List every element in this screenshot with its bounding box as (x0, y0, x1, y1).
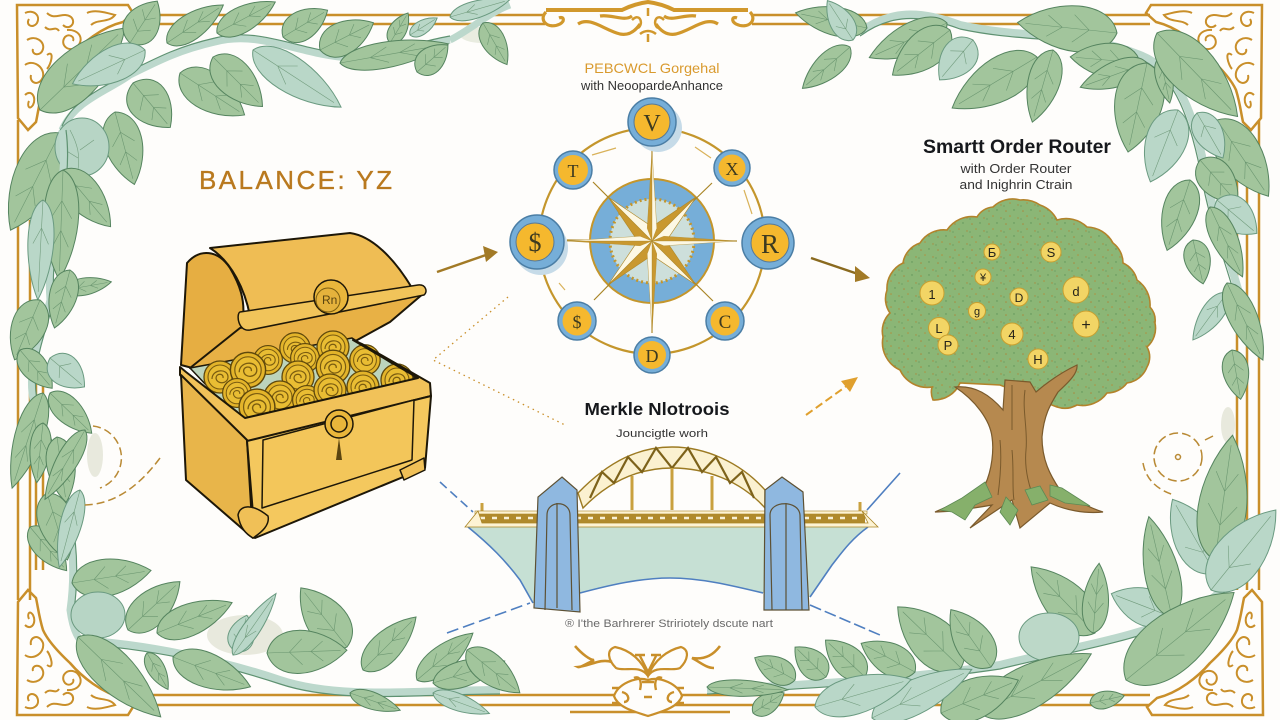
bridge arch (578, 447, 765, 508)
arrow: chest to compass (437, 246, 498, 272)
heading: compass (580, 60, 723, 93)
coin symbols: S (1047, 245, 1056, 260)
bottom centre ornament (570, 646, 730, 716)
compass coin nodes: $ (528, 228, 542, 257)
arrow: bridge to tree (806, 377, 858, 415)
coin symbols: L (935, 321, 943, 336)
bridge hangers (482, 468, 860, 512)
treasure chest icon (180, 233, 431, 538)
bridge caption: ® I'the Barhrerer Stririotely dscute nart (565, 618, 773, 630)
compass coin nodes: X (726, 159, 738, 179)
bridge water body (468, 527, 868, 603)
chest interior with coins (190, 331, 418, 425)
coin symbols: g (974, 306, 980, 318)
decorative dashed circle right (1143, 433, 1213, 495)
foliage: bottom-left vine (64, 552, 529, 720)
treasure chest icon: Rn (322, 293, 337, 307)
compass coin nodes: R (761, 229, 779, 259)
coin symbols: ¥ (979, 272, 987, 284)
coin symbols: 1 (928, 287, 936, 302)
coin symbols: d (1072, 284, 1080, 299)
dotted connector (433, 297, 565, 425)
heading: bridge: Merkle Nlotroois (584, 399, 730, 419)
tree crown (882, 199, 1156, 408)
compass coin nodes: D (646, 346, 658, 366)
compass rose (567, 150, 737, 333)
compass centre disc (590, 179, 714, 303)
tree coins (920, 242, 1099, 369)
foliage: bottom-right vine (707, 432, 1280, 720)
coin symbols: D (1015, 291, 1024, 305)
heading: compass: PEBCWCL Gorgehal (584, 60, 720, 76)
decorative dashed circle left (83, 426, 160, 505)
heading: router (923, 137, 1112, 192)
foliage: left side vine (0, 130, 124, 640)
arrow: compass to tree (811, 258, 870, 282)
foliage: top-right vine (793, 0, 1280, 443)
heading: compass: with NeoopardeAnhance (580, 78, 723, 93)
dashed bridge cables (440, 473, 900, 635)
heading: bridge (584, 399, 730, 440)
heading: bridge: Jouncigtle worh (616, 428, 708, 440)
top centre ornament (543, 2, 753, 42)
compass coin nodes: V (643, 111, 661, 137)
coin symbols: P (944, 338, 952, 353)
coin symbols: H (1033, 352, 1043, 367)
foliage: top-left vine (0, 0, 517, 241)
heading: router: and Inighrin Ctrain (960, 178, 1073, 192)
compass coin nodes: C (719, 312, 731, 333)
compass router diagram (510, 98, 794, 373)
coin symbols: + (1081, 317, 1091, 334)
root foliage (940, 482, 1090, 525)
right pier (764, 477, 809, 610)
tree illustration (882, 199, 1156, 528)
bridge deck (475, 511, 867, 514)
compass coin nodes (510, 98, 794, 373)
left pier (534, 477, 809, 612)
tree trunk and roots (935, 365, 1103, 528)
heading: router: with Order Router (959, 162, 1072, 176)
coin symbols: Б (988, 245, 996, 260)
coin symbols (928, 245, 1091, 367)
compass spokes (567, 150, 737, 333)
heading: router: Smartt Order Router (923, 137, 1112, 158)
coin symbols: 4 (1008, 327, 1016, 342)
compass coin nodes: $ (572, 312, 582, 332)
heading: balance: BALANCE: YZ (199, 165, 392, 195)
bridge illustration (440, 447, 900, 635)
compass coin nodes: T (568, 161, 578, 181)
